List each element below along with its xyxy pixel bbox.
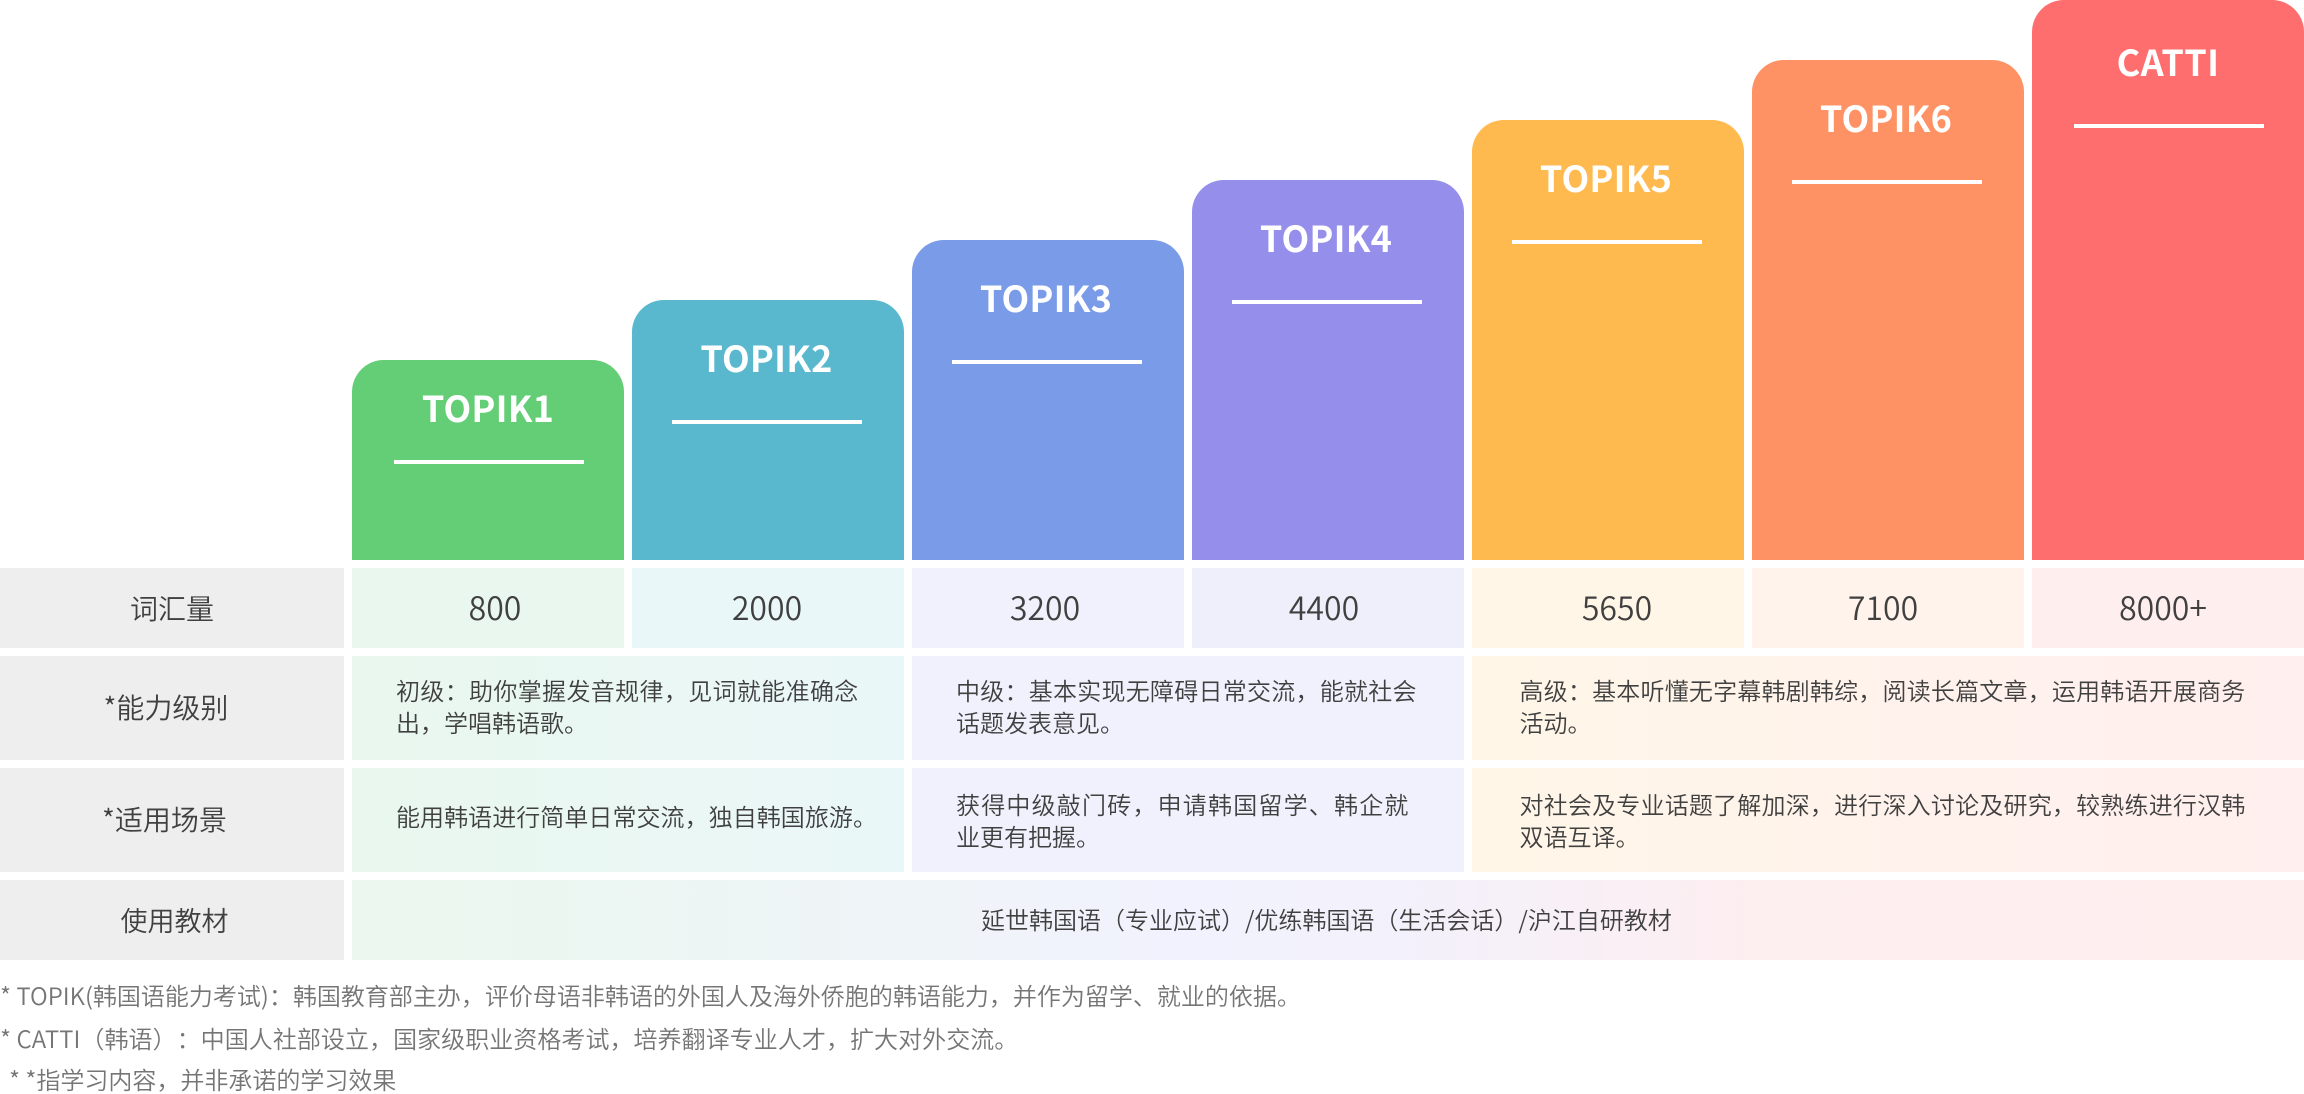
row label: 适用场景: *适用场景 <box>102 799 227 839</box>
cell: 高级能力: 活动。 <box>1520 704 1592 739</box>
cell: 中级场景: 获得中级敲门砖，申请韩国留学、韩企就 <box>956 786 1410 821</box>
row label: 使用教材: 使用教材 <box>120 900 228 938</box>
value: TOPIK1 vocabulary: 800 <box>469 584 521 630</box>
row label: 词汇量 <box>0 568 344 648</box>
value: CATTI vocabulary <box>2032 568 2304 648</box>
cell: 中级场景: 业更有把握。 <box>956 818 1100 853</box>
value: TOPIK3 vocabulary <box>912 568 1184 648</box>
footnote: CATTI: * CATTI（韩语）：中国人社部设立，国家级职业资格考试，培养翻译专业人才，扩大对外交流。 <box>0 1020 1018 1055</box>
cell: 中级场景 <box>912 768 1464 872</box>
value: TOPIK5 vocabulary: 5650 <box>1582 584 1652 630</box>
bar: TOPIK4 <box>1192 180 1464 560</box>
cell: 高级场景: 双语互译。 <box>1520 818 1640 853</box>
bar: TOPIK2: TOPIK2 <box>700 331 833 383</box>
cell: 高级能力: 高级：基本听懂无字幕韩剧韩综，阅读长篇文章，运用韩语开展商务 <box>1520 672 2246 707</box>
cell: 使用教材内容 <box>352 880 2304 960</box>
cell: 高级场景 <box>1472 768 2304 872</box>
bar: CATTI <box>2032 0 2304 560</box>
row label: 能力级别 <box>0 656 344 760</box>
cell: 初级场景 <box>352 768 904 872</box>
cell: 初级能力: 初级：助你掌握发音规律，见词就能准确念 <box>396 672 859 707</box>
bar: TOPIK1 <box>352 360 624 560</box>
value: TOPIK2 vocabulary <box>632 568 904 648</box>
cell: 中级能力: 话题发表意见。 <box>956 704 1124 739</box>
row label: 能力级别: *能力级别 <box>104 687 228 727</box>
cell: 中级能力 <box>912 656 1464 760</box>
bar: CATTI: CATTI <box>2117 35 2219 87</box>
row label: 词汇量: 词汇量 <box>130 588 214 628</box>
value: TOPIK4 vocabulary <box>1192 568 1464 648</box>
bar: TOPIK3: TOPIK3 <box>980 271 1112 323</box>
value: TOPIK1 vocabulary <box>352 568 624 648</box>
cell: 高级能力 <box>1472 656 2304 760</box>
cell: 初级能力: 出，学唱韩语歌。 <box>396 704 588 739</box>
value: TOPIK3 vocabulary: 3200 <box>1010 584 1080 630</box>
bar: TOPIK1: TOPIK1 <box>422 381 554 433</box>
bar: TOPIK3 <box>912 240 1184 560</box>
bar: TOPIK6: TOPIK6 <box>1820 91 1952 143</box>
value: TOPIK5 vocabulary <box>1472 568 1744 648</box>
cell: 中级能力: 中级：基本实现无障碍日常交流，能就社会 <box>956 672 1417 707</box>
value: CATTI vocabulary: 8000+ <box>2119 584 2207 630</box>
value: TOPIK6 vocabulary <box>1752 568 2024 648</box>
value: TOPIK4 vocabulary: 4400 <box>1289 584 1359 630</box>
cell: 初级场景: 能用韩语进行简单日常交流，独自韩国旅游。 <box>396 798 877 833</box>
footnotes <box>0 977 1301 1094</box>
bar: TOPIK4: TOPIK4 <box>1260 211 1392 263</box>
footnote: TOPIK: * TOPIK(韩国语能力考试)：韩国教育部主办，评价母语非韩语的外国人及海外侨胞的韩语能力，并作为留学、就业的依据。 <box>0 977 1301 1012</box>
cell: 高级场景: 对社会及专业话题了解加深，进行深入讨论及研究，较熟练进行汉韩 <box>1520 786 2246 821</box>
bar: TOPIK6 <box>1752 60 2024 560</box>
bar: TOPIK2 <box>632 300 904 560</box>
cell: 初级能力 <box>352 656 904 760</box>
cell: 使用教材内容: 延世韩国语（专业应试）/优练韩国语（生活会话）/沪江自研教材 <box>981 901 1672 936</box>
value: TOPIK6 vocabulary: 7100 <box>1848 584 1918 630</box>
row label: 使用教材 <box>0 880 344 960</box>
bar: TOPIK5: TOPIK5 <box>1540 151 1672 203</box>
row label: 适用场景 <box>0 768 344 872</box>
bar: TOPIK5 <box>1472 120 1744 560</box>
value: TOPIK2 vocabulary: 2000 <box>732 584 802 630</box>
